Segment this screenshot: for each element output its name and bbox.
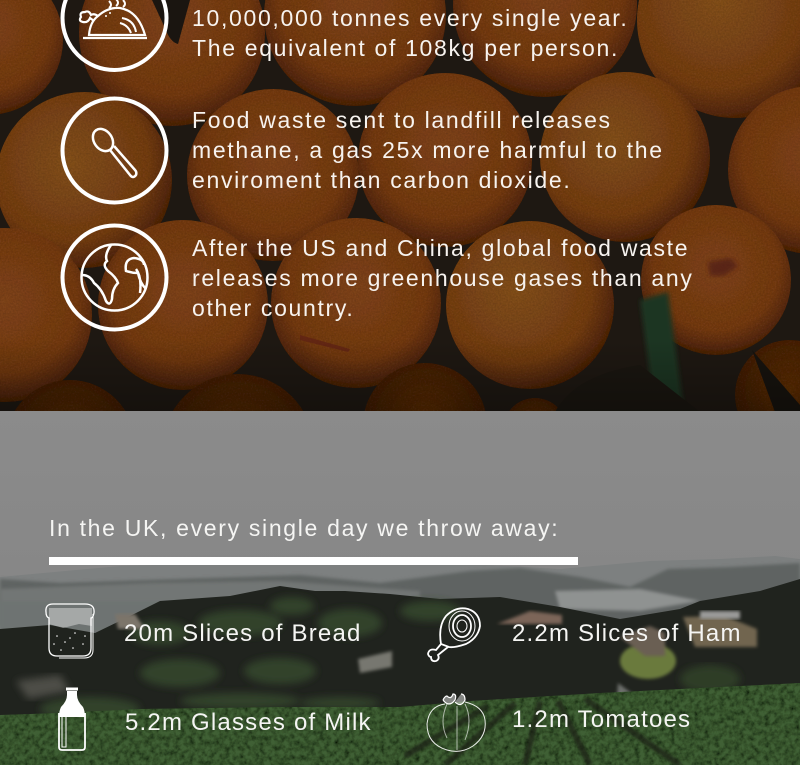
stat: tomatoes: 1.2m Tomatoes — [512, 706, 691, 733]
text block: methane: Food waste sent to landfill releases — [192, 107, 612, 133]
stat: ham: 2.2m Slices of Ham — [512, 620, 742, 647]
text block: methane: methane, a gas 25x more harmful to the — [192, 137, 664, 163]
icon: ham — [427, 607, 481, 662]
houses — [497, 611, 562, 624]
text block: tonnes: The equivalent of 108kg per person. — [192, 35, 619, 61]
heading: UK daily waste: In the UK, every single day we throw away: — [49, 515, 559, 541]
text block: greenhouse gases: other country. — [192, 295, 354, 321]
text block: greenhouse gases: After the US and China, global food waste — [192, 235, 689, 261]
far hills — [0, 556, 800, 651]
icon: bread slice — [45, 603, 95, 658]
text block: methane: enviroment than carbon dioxide. — [192, 167, 571, 193]
heading underline bar — [49, 557, 578, 565]
stat: milk: 5.2m Glasses of Milk — [125, 709, 372, 736]
icon: spoon in circle — [60, 96, 168, 204]
icon: milk bottle — [58, 688, 86, 751]
text block: greenhouse gases — [192, 235, 694, 321]
text block: tonnes — [192, 5, 628, 61]
text block: greenhouse gases: releases more greenhouse gases than any — [192, 265, 694, 291]
vineyard — [0, 683, 800, 765]
text block: methane — [192, 107, 664, 193]
stat: bread: 20m Slices of Bread — [124, 620, 362, 647]
icon: tomato — [426, 693, 486, 752]
text block: tonnes: 10,000,000 tonnes every single year. — [192, 5, 628, 31]
icon: roast chicken in circle — [60, 0, 168, 72]
panel: vineyard photo background — [0, 411, 800, 765]
icon: globe in circle — [60, 224, 168, 332]
dark trees — [0, 579, 800, 731]
panel: oranges photo background — [0, 0, 800, 411]
